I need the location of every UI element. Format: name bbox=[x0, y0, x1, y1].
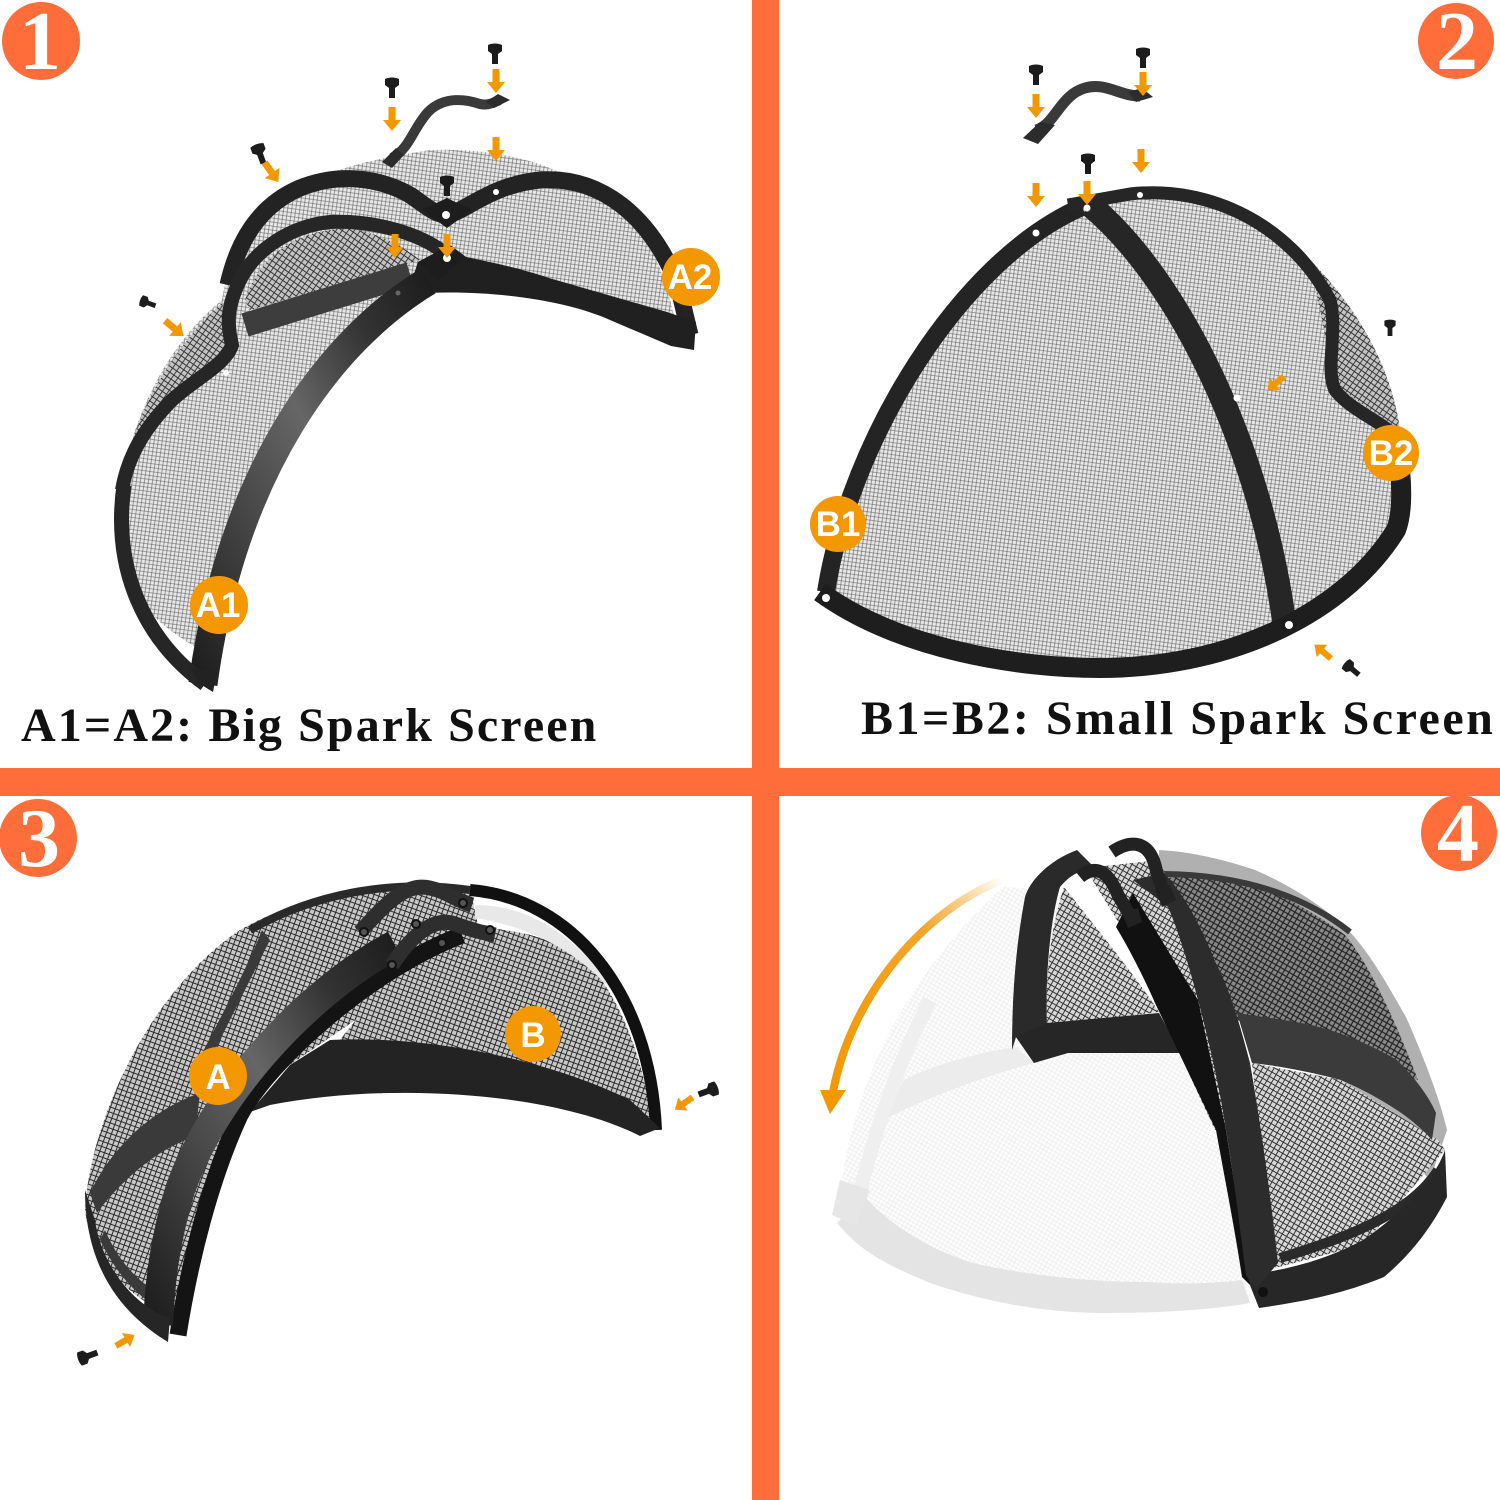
main rib bbox=[203, 281, 428, 684]
label A1 bbox=[190, 576, 248, 634]
panel 4: rotating screen open bbox=[820, 844, 1447, 1313]
label B1: B1 bbox=[816, 505, 860, 544]
mesh dome left bbox=[85, 887, 480, 1320]
upper band bbox=[228, 179, 690, 335]
screws and arrows bbox=[1027, 48, 1396, 680]
top strap bbox=[382, 94, 510, 168]
rotation arrow bbox=[820, 880, 1002, 1114]
step number 4 bbox=[1421, 787, 1497, 880]
step number 2 bbox=[1418, 0, 1494, 88]
top arc band bbox=[250, 886, 470, 930]
wavy band bbox=[122, 222, 447, 490]
dark mesh strip bbox=[245, 274, 410, 325]
lower rim bbox=[122, 485, 205, 684]
inner rib bbox=[1116, 893, 1250, 1285]
label A2 bbox=[662, 248, 720, 306]
mesh dome bbox=[820, 195, 1405, 667]
outer dome light mesh bbox=[1159, 850, 1447, 1180]
darker inner mesh bbox=[245, 228, 420, 310]
step number 4: 4 bbox=[1437, 787, 1479, 880]
label A: A bbox=[205, 1058, 231, 1097]
label A2: A2 bbox=[668, 258, 712, 297]
label B bbox=[505, 1006, 561, 1062]
base band bbox=[820, 470, 1401, 668]
panel 1: big spark screen bbox=[118, 44, 720, 692]
side screws and arrows bbox=[76, 1081, 720, 1366]
label A bbox=[189, 1047, 247, 1105]
rib B bbox=[178, 935, 462, 1335]
panel 2: small spark screen bbox=[810, 48, 1419, 680]
straps bbox=[360, 887, 495, 965]
base band right bbox=[1246, 1150, 1447, 1308]
dark strip bbox=[1237, 1013, 1436, 1140]
back mesh dark bbox=[1165, 877, 1418, 1080]
top right band bbox=[1068, 193, 1400, 440]
label B2: B2 bbox=[1369, 434, 1413, 473]
label B2 bbox=[1363, 425, 1419, 481]
screws and arrows bbox=[138, 44, 505, 343]
lower mesh bbox=[1252, 1063, 1445, 1268]
outer left mesh bbox=[124, 303, 235, 478]
top strap bbox=[1023, 87, 1153, 144]
panel 3: screens joined with straps bbox=[76, 886, 720, 1366]
ghost closed dome bbox=[832, 887, 1250, 1313]
left rim bbox=[85, 1190, 170, 1342]
label A1: A1 bbox=[196, 586, 240, 625]
main rib bbox=[1133, 873, 1278, 1290]
rib A bbox=[158, 945, 395, 1325]
bolt holes bbox=[223, 189, 499, 376]
bottom screw bbox=[1258, 1287, 1268, 1297]
label B: B bbox=[520, 1016, 546, 1055]
rib mesh sliver bbox=[1085, 860, 1232, 1130]
arch base bbox=[1016, 1013, 1181, 1063]
mesh dome bbox=[118, 150, 675, 650]
dark mesh rim strip bbox=[1280, 1170, 1438, 1258]
straps bbox=[1080, 844, 1166, 920]
right lower band bbox=[414, 245, 696, 350]
lower band bbox=[250, 1039, 660, 1136]
strap screws bbox=[360, 899, 494, 969]
back mesh bbox=[1310, 260, 1400, 430]
label B1 bbox=[810, 496, 866, 552]
heading: small spark screen: B1=B2: Small Spark Screen bbox=[861, 692, 1495, 745]
plates bbox=[418, 198, 472, 280]
inner arch mesh bbox=[1047, 887, 1159, 1026]
mesh dome right bbox=[330, 925, 652, 1118]
heading: big spark screen: A1=A2: Big Spark Screen bbox=[21, 699, 598, 752]
top rim arc bbox=[1164, 874, 1350, 932]
step number 3: 3 bbox=[18, 792, 60, 885]
end tip bbox=[190, 668, 217, 692]
bolt holes bbox=[822, 192, 1293, 629]
central band bbox=[1090, 205, 1285, 628]
step number 3 bbox=[0, 792, 77, 885]
step number 1 bbox=[2, 0, 80, 88]
strap plates bbox=[1122, 885, 1176, 928]
right arc bbox=[470, 890, 656, 1130]
small arch bbox=[1012, 850, 1095, 1063]
dark mesh strips bbox=[90, 930, 270, 1310]
upper light mesh bbox=[475, 905, 620, 1000]
left band bbox=[826, 207, 1082, 592]
